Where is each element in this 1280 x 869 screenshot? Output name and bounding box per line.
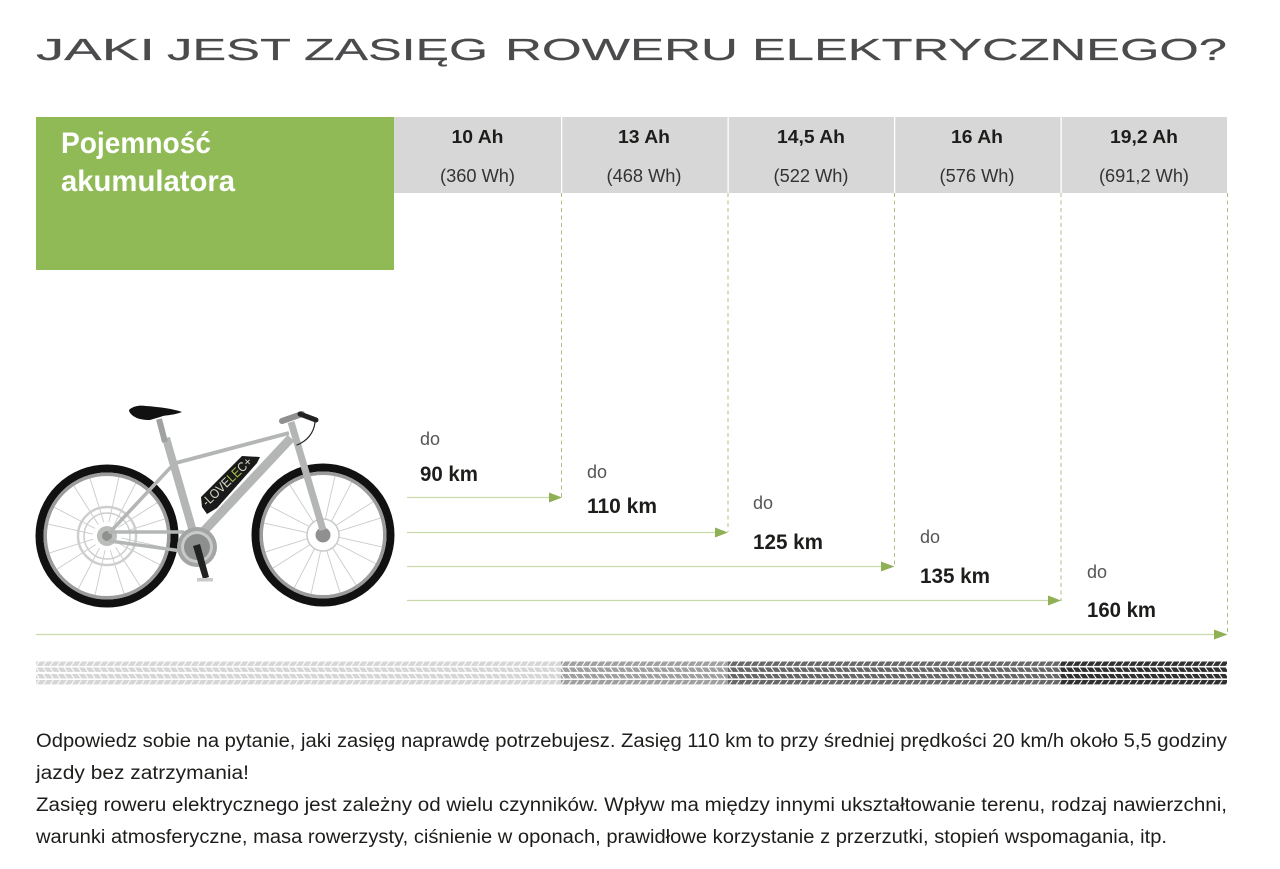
- table header: battery capacities: (360 Wh): [440, 165, 515, 186]
- range label: 125 km: [753, 493, 823, 554]
- title: [36, 32, 1227, 67]
- body text: Odpowiedz sobie na pytanie, jaki zasięg naprawdę potrzebujesz. Zasięg 110 km to przy średniej prędkości 20 km/h około 5,5 godziny: [36, 731, 1228, 752]
- arrow: 90 km: [407, 492, 562, 502]
- table header: battery capacities: 10 Ah: [452, 127, 504, 147]
- icon: electric bicycle: [40, 406, 390, 604]
- handlebar: [282, 414, 316, 445]
- range label: 125 km: 125 km: [753, 531, 823, 554]
- table header: battery capacities: 14,5 Ah: [777, 127, 845, 147]
- title: JEST: [167, 32, 291, 67]
- battery: -LOVELEC+: [199, 454, 255, 509]
- arrow: 125 km: [407, 562, 894, 572]
- arrow: 110 km: [407, 528, 728, 538]
- range label: 160 km: [1087, 562, 1156, 622]
- table header: battery capacities: 13 Ah: [618, 127, 670, 147]
- range label: 110 km: [587, 462, 657, 518]
- body text: jazdy bez zatrzymania!: [35, 763, 249, 784]
- table header: battery capacities: [394, 117, 1227, 193]
- chain stays and seat stay: [110, 468, 183, 551]
- body text: Zasięg roweru elektrycznego jest zależny od wielu czynników. Wpływ ma między innymi ukształtowanie terenu, rodzaj nawierzchni,: [36, 795, 1227, 816]
- range label: 90 km: do: [420, 429, 440, 449]
- table header: battery capacities: (468 Wh): [606, 165, 682, 186]
- range label: 160 km: do: [1087, 562, 1107, 582]
- saddle: [129, 406, 182, 420]
- frame: [159, 419, 323, 535]
- title: JAKI: [36, 32, 155, 67]
- tyre track strip: [36, 662, 1227, 684]
- panel: battery capacity label: [36, 117, 394, 270]
- range label: 135 km: [920, 527, 990, 588]
- panel: battery capacity label: Pojemność: [61, 127, 211, 160]
- range label: 110 km: do: [587, 462, 607, 482]
- table header: battery capacities: (522 Wh): [774, 165, 848, 186]
- dashed column guides: [562, 193, 1228, 635]
- title: ZASIĘG: [304, 32, 488, 67]
- range label: 110 km: 110 km: [587, 495, 657, 518]
- title: ROWERU: [505, 32, 738, 67]
- table header: battery capacities: 19,2 Ah: [1110, 127, 1178, 147]
- range label: 90 km: 90 km: [420, 463, 478, 486]
- arrow: 135 km: [407, 596, 1061, 606]
- range label: 90 km: [420, 429, 478, 486]
- table header: battery capacities: (691,2 Wh): [1099, 165, 1189, 186]
- range label: 135 km: do: [920, 527, 940, 547]
- range label: 135 km: 135 km: [920, 565, 990, 588]
- panel: battery capacity label: akumulatora: [61, 165, 235, 198]
- rear wheel: [40, 468, 174, 604]
- table header: battery capacities: 16 Ah: [951, 127, 1003, 147]
- title: ELEKTRYCZNEGO?: [752, 32, 1227, 67]
- arrow: 160 km: [36, 630, 1228, 640]
- range label: 125 km: do: [753, 493, 773, 513]
- table header: battery capacities: (576 Wh): [940, 165, 1014, 186]
- chainring and crank: [177, 527, 217, 582]
- body text: [35, 731, 1228, 848]
- body text: warunki atmosferyczne, masa rowerzysty, ciśnienie w oponach, prawidłowe korzystanie z przerzutki, stopień wspomagania, itp.: [35, 827, 1167, 848]
- range label: 160 km: 160 km: [1087, 599, 1156, 622]
- front wheel: [256, 468, 390, 602]
